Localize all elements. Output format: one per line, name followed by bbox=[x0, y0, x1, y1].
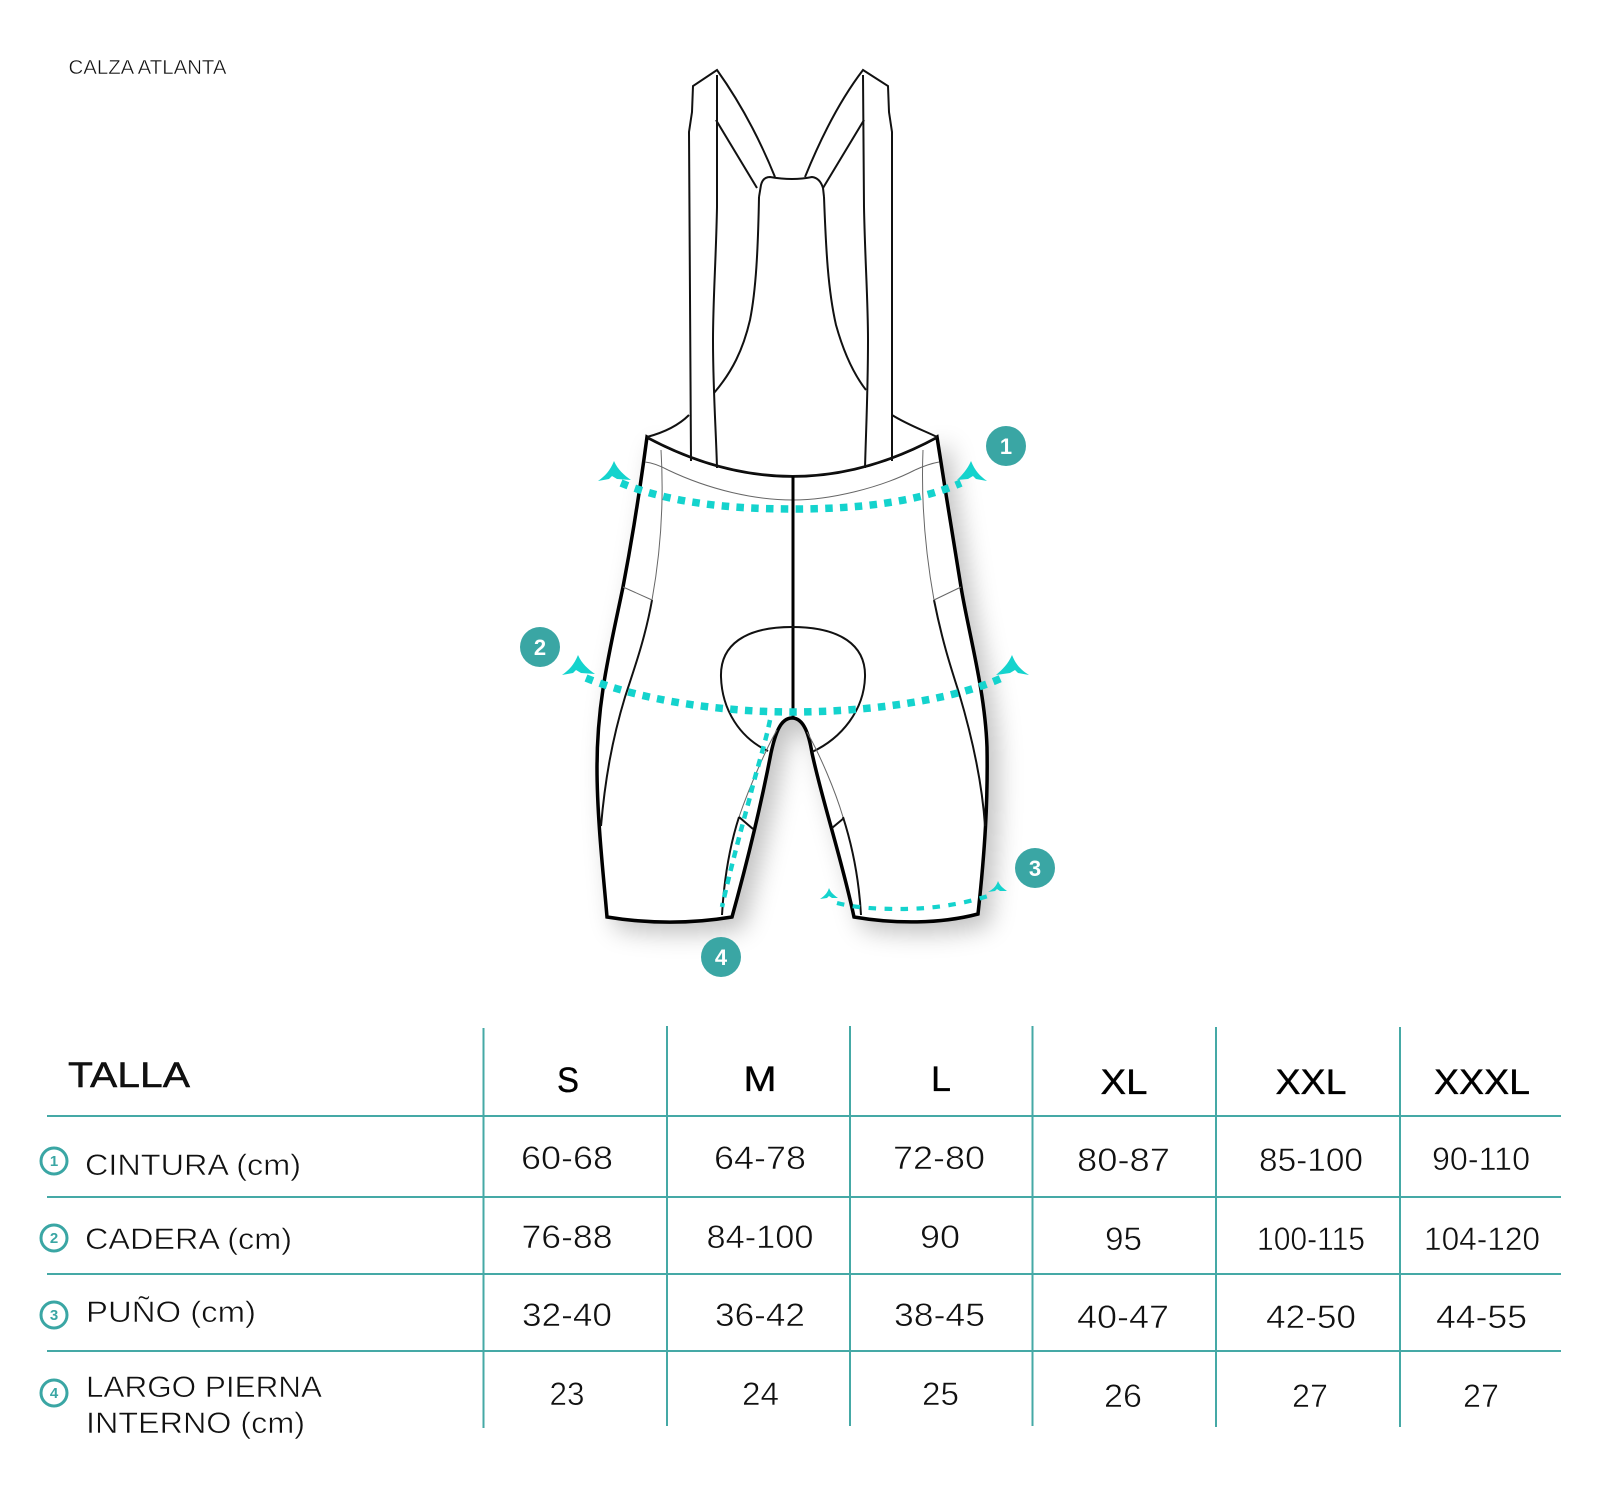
row: cintura: 1 bbox=[50, 1153, 58, 1170]
row: puño: 38-45 bbox=[894, 1297, 985, 1333]
header row bbox=[68, 1056, 1530, 1102]
garment diagram bbox=[520, 70, 1055, 977]
row: largo pierna interno: LARGO PIERNA bbox=[86, 1371, 322, 1404]
row: puño: 36-42 bbox=[715, 1297, 805, 1333]
header row: L bbox=[931, 1060, 951, 1099]
marker 1: 1 bbox=[1000, 434, 1012, 459]
row: cintura: 60-68 bbox=[521, 1140, 613, 1176]
row: cintura: CINTURA (cm) bbox=[85, 1149, 301, 1182]
row: cadera: 76-88 bbox=[522, 1219, 612, 1255]
header row: TALLA bbox=[68, 1056, 191, 1095]
row: cadera: CADERA (cm) bbox=[85, 1223, 292, 1256]
header row: XXXL bbox=[1434, 1063, 1530, 1102]
arrow: waist measurement bbox=[598, 461, 987, 509]
waistband and panel seams bbox=[601, 450, 985, 826]
row: cadera: 95 bbox=[1105, 1221, 1142, 1257]
header row: XL bbox=[1100, 1063, 1148, 1102]
row: largo pierna interno: INTERNO (cm) bbox=[86, 1407, 305, 1440]
marker 3 bbox=[1015, 848, 1055, 888]
row: puño: 44-55 bbox=[1436, 1299, 1527, 1335]
shorts body with drop shadow bbox=[597, 437, 987, 922]
row: largo pierna interno: 26 bbox=[1104, 1378, 1142, 1414]
arrow: hip measurement bbox=[562, 655, 1029, 712]
row: cintura: 64-78 bbox=[714, 1140, 806, 1176]
marker 2: 2 bbox=[534, 635, 546, 660]
row: cadera: 90 bbox=[920, 1219, 960, 1255]
row: cintura: 72-80 bbox=[893, 1140, 985, 1176]
inner leg panels bbox=[722, 730, 861, 915]
row: puño: 3 bbox=[50, 1307, 58, 1324]
row: cadera: 84-100 bbox=[706, 1219, 814, 1255]
title: product name: CALZA ATLANTA bbox=[68, 57, 227, 79]
row: puño: 42-50 bbox=[1266, 1299, 1356, 1335]
row: cadera bbox=[41, 1219, 1540, 1257]
arrow: cuff measurement bbox=[820, 881, 1007, 909]
row: cadera: 100-115 bbox=[1257, 1221, 1365, 1257]
table grid bbox=[47, 1026, 1561, 1428]
row: largo pierna interno: 25 bbox=[922, 1376, 959, 1412]
row: cadera: 2 bbox=[50, 1230, 58, 1247]
row: largo pierna interno: 27 bbox=[1292, 1378, 1328, 1414]
bib upper and straps bbox=[647, 70, 937, 476]
arrow: inner leg length bbox=[722, 720, 770, 907]
row: largo pierna interno: 27 bbox=[1463, 1378, 1499, 1414]
row: puño: PUÑO (cm) bbox=[86, 1295, 256, 1329]
row: largo pierna interno: 23 bbox=[550, 1376, 584, 1412]
marker 1 bbox=[986, 426, 1026, 466]
header row: XXL bbox=[1276, 1063, 1346, 1102]
row: cintura: 85-100 bbox=[1259, 1142, 1363, 1178]
row: largo pierna interno bbox=[41, 1371, 1499, 1440]
row: cintura: 90-110 bbox=[1432, 1141, 1530, 1177]
size table bbox=[41, 1026, 1561, 1440]
row: puño bbox=[41, 1295, 1527, 1335]
marker 4 bbox=[701, 937, 741, 977]
marker 2 bbox=[520, 627, 560, 667]
row: cintura: 80-87 bbox=[1077, 1142, 1170, 1178]
header row: S bbox=[557, 1061, 579, 1100]
marker 3: 3 bbox=[1029, 856, 1041, 881]
marker 4: 4 bbox=[715, 945, 728, 970]
row: puño: 40-47 bbox=[1077, 1299, 1169, 1335]
seat pad outline bbox=[721, 627, 865, 752]
row: cadera: 104-120 bbox=[1424, 1221, 1540, 1257]
row: largo pierna interno: 24 bbox=[742, 1376, 779, 1412]
row: cintura bbox=[41, 1140, 1530, 1182]
row: largo pierna interno: 4 bbox=[50, 1385, 59, 1402]
row: puño: 32-40 bbox=[522, 1297, 612, 1333]
header row: M bbox=[744, 1060, 776, 1099]
